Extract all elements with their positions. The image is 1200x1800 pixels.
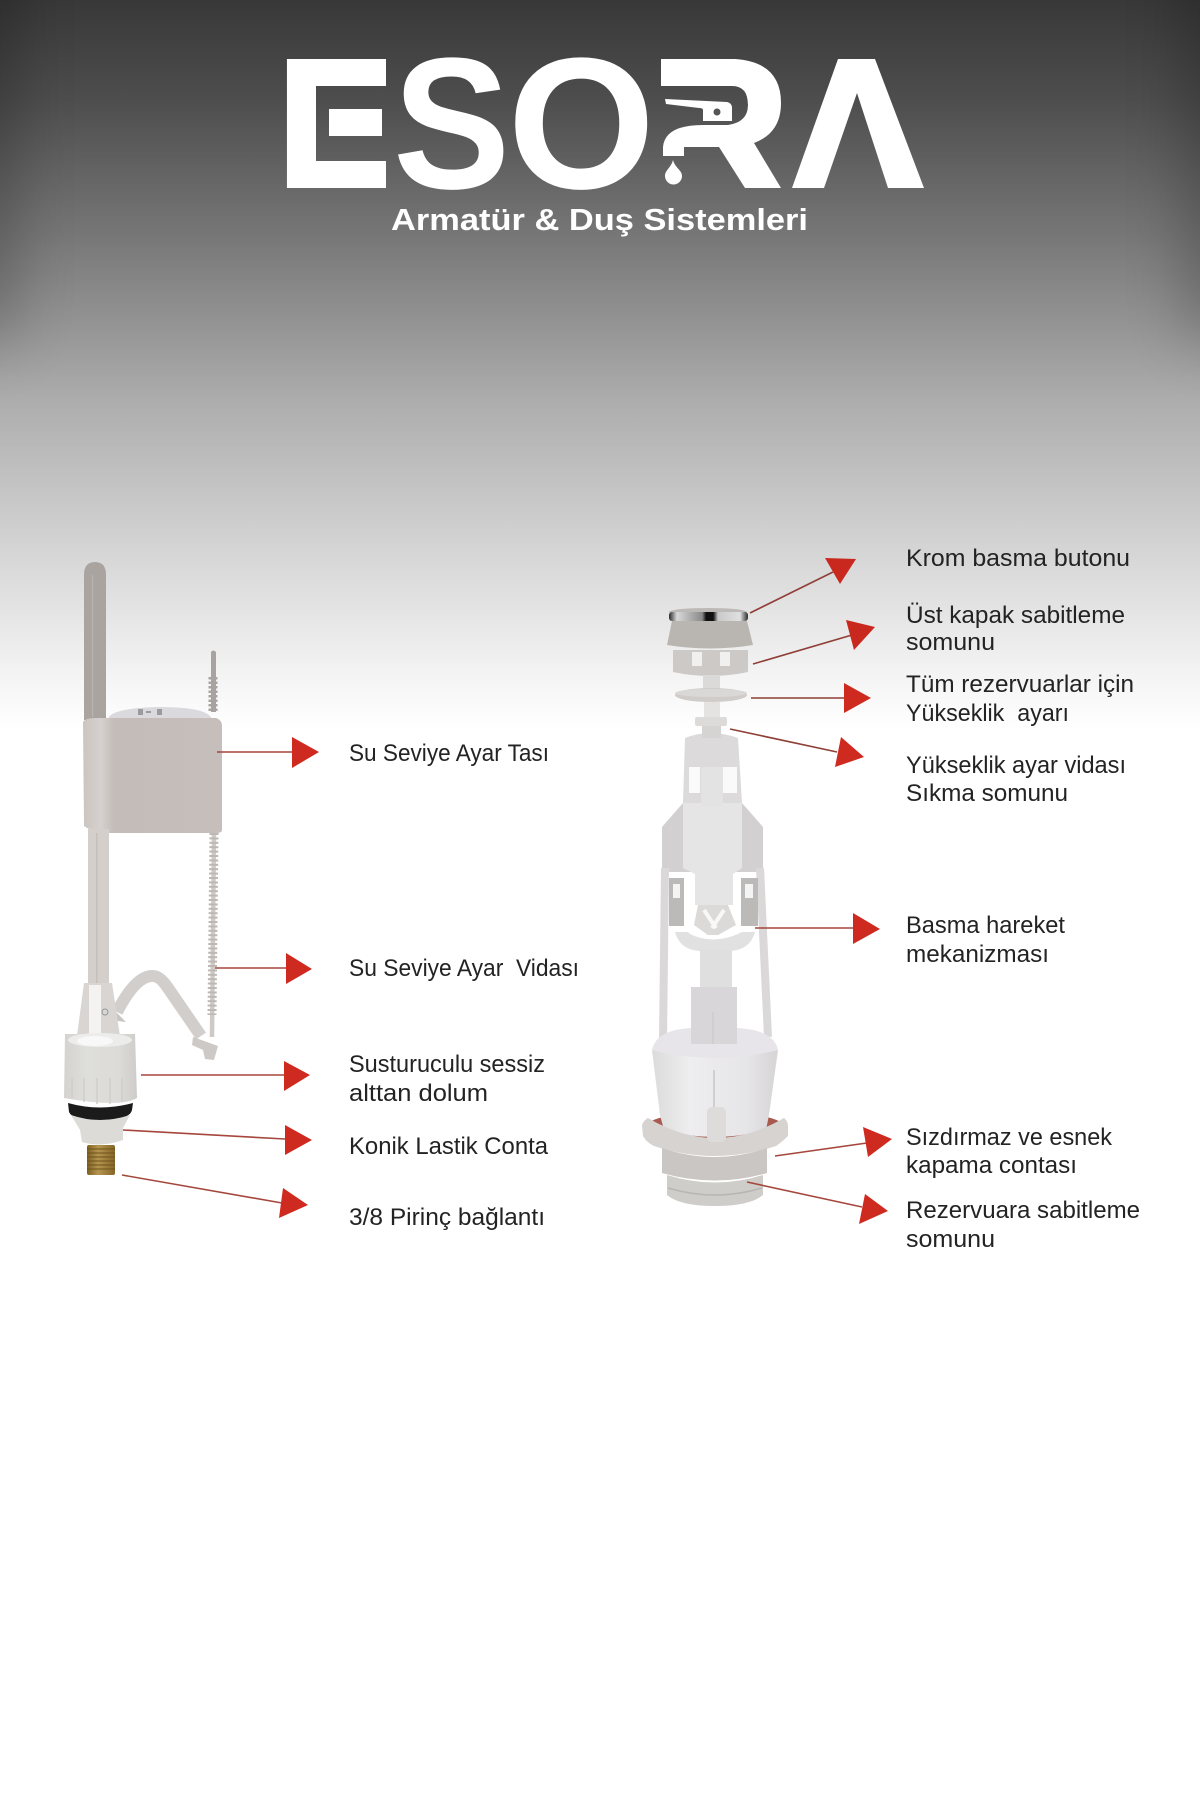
stem and disc <box>703 675 720 690</box>
mounting nut <box>662 1148 767 1180</box>
label: Basma hareket <box>906 912 1065 939</box>
float arm <box>117 976 201 1036</box>
adjusting nut <box>695 717 727 726</box>
label: Konik Lastik Conta <box>349 1133 549 1160</box>
label: kapama contası <box>906 1152 1077 1179</box>
label: Sıkma somunu <box>906 780 1068 807</box>
red sealing gasket <box>647 1112 783 1140</box>
top label plate <box>108 707 212 720</box>
label: Üst kapak sabitleme <box>906 602 1125 629</box>
label: Krom basma butonu <box>906 545 1130 572</box>
float body <box>652 1050 778 1137</box>
float box <box>83 718 222 833</box>
arrow: Tüm rezervuarlar <box>751 683 871 713</box>
arrow: Krom basma butonu <box>750 558 856 613</box>
label: somunu <box>906 629 995 656</box>
icon: water drop <box>665 160 682 184</box>
brass connection <box>87 1145 115 1175</box>
outer frame rods <box>663 868 768 1040</box>
label: Susturuculu sessiz <box>349 1051 545 1078</box>
conical seat <box>71 1115 130 1145</box>
product: fill valve (left) <box>64 562 222 1175</box>
label: mekanizması <box>906 941 1049 968</box>
logo: ESORA wordmark: S <box>393 20 510 228</box>
arrow: Susturuculu <box>141 1061 310 1091</box>
arrow: 3/8 Pirinç <box>122 1175 308 1218</box>
threaded chain <box>212 833 214 1037</box>
retaining nut <box>673 650 748 676</box>
silencer body <box>64 1034 137 1103</box>
labels: right column <box>906 545 1140 1253</box>
lower rod <box>88 829 109 989</box>
label: Yükseklik ayarı <box>906 700 1069 727</box>
label: Tüm rezervuarlar için <box>906 671 1134 698</box>
product: flush valve (right) <box>642 608 788 1206</box>
icon: faucet handle <box>665 99 732 121</box>
arrow: Basma hareket <box>755 913 880 944</box>
logo: ESORA wordmark: O <box>508 18 655 228</box>
arrow: Su Seviye Ayar Tası <box>217 737 319 768</box>
upper window column <box>683 803 742 905</box>
arrow: Üst kapak <box>753 620 875 664</box>
label: Rezervuara sabitleme <box>906 1197 1140 1224</box>
label: 3/8 Pirinç bağlantı <box>349 1204 545 1231</box>
arrow: Yükseklik ayar vidası <box>730 729 864 767</box>
threaded adjuster rod <box>211 650 216 712</box>
flange ring <box>642 1118 788 1156</box>
black seal ring <box>68 1103 133 1120</box>
logo: ESORA wordmark: E <box>275 18 394 228</box>
label: Sızdırmaz ve esnek <box>906 1124 1113 1151</box>
outer frame wings <box>662 803 763 872</box>
label: Su Seviye Ayar Tası <box>349 740 549 767</box>
label: Su Seviye Ayar Vidası <box>349 955 579 982</box>
logo: ESORA wordmark: R <box>648 19 784 228</box>
arrow: Sızdırmaz <box>775 1127 892 1157</box>
thread bottom <box>667 1175 763 1206</box>
mechanism <box>669 878 758 926</box>
logo: ESORA wordmark <box>275 18 924 228</box>
tagline: Armatür & Duş Sistemleri <box>391 202 808 237</box>
arrow: Rezervuara <box>747 1182 888 1224</box>
labels: left column <box>349 740 579 1231</box>
label: Yükseklik ayar vidası <box>906 752 1126 779</box>
logo: ESORA wordmark: A <box>792 19 924 228</box>
arrow: Su Seviye Ayar Vidası <box>215 953 312 984</box>
cap <box>667 621 753 648</box>
arrow: Konik Lastik Conta <box>123 1125 312 1155</box>
lower stem <box>700 950 732 990</box>
valve stem <box>77 983 120 1036</box>
label: somunu <box>906 1226 995 1253</box>
tall rod <box>84 562 106 720</box>
label: alttan dolum <box>349 1080 488 1107</box>
button chrome <box>669 608 747 616</box>
